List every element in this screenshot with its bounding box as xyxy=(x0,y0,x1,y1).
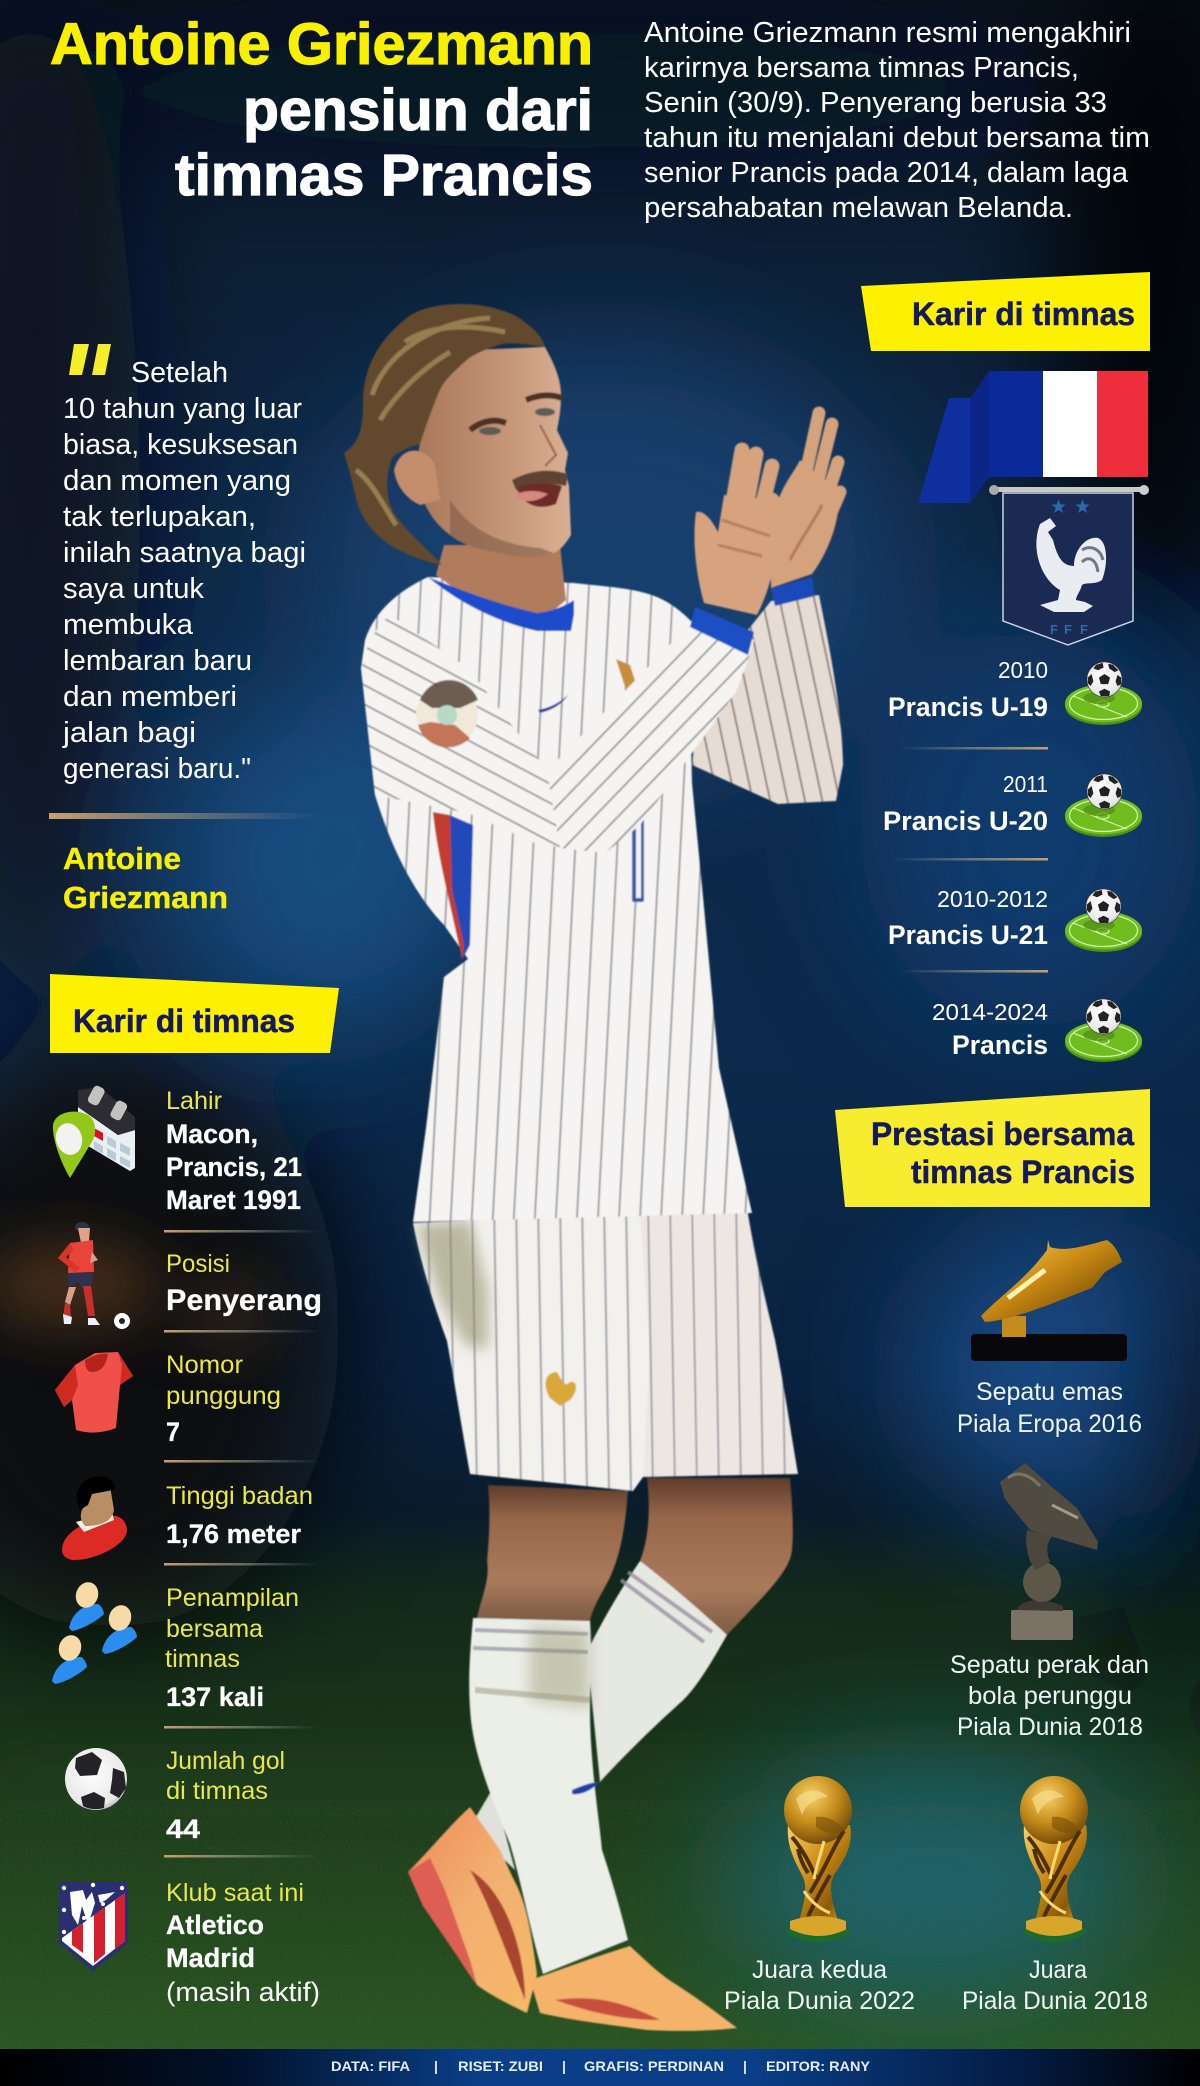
banner: karir di timnas right xyxy=(861,272,1150,351)
biodata penampilan: 137 kali xyxy=(166,1682,264,1712)
title xyxy=(50,12,593,208)
quote: 10 tahun yang luar xyxy=(63,393,302,425)
footer credits: GRAFIS: PERDINAN xyxy=(584,2058,724,2074)
biodata tinggi badan xyxy=(62,1476,313,1560)
icon: fff crest pennant: F xyxy=(1080,622,1088,637)
footer credits xyxy=(0,2049,1200,2086)
footer credits: DATA: FIFA xyxy=(331,2058,410,2074)
intro text block: karirnya bersama timnas Prancis, xyxy=(644,52,1079,84)
icon: ball on pitch xyxy=(1065,774,1142,837)
icon: player xyxy=(58,1222,130,1329)
quote: saya untuk xyxy=(63,573,204,605)
icon: quote marks xyxy=(69,344,111,375)
intro text block: Senin (30/9). Penyerang berusia 33 xyxy=(644,87,1107,119)
biodata posisi: Penyerang xyxy=(166,1284,322,1317)
career item U-19: Prancis U-19 xyxy=(888,692,1048,722)
biodata nomor punggung: Nomor xyxy=(166,1351,243,1379)
icon: atletico crest xyxy=(59,1882,128,1971)
biodata lahir: Maret 1991 xyxy=(166,1185,301,1215)
biodata lahir xyxy=(52,1084,302,1215)
intro text block: Antoine Griezmann resmi mengakhiri xyxy=(644,17,1131,49)
quote: generasi baru." xyxy=(63,753,251,785)
quote: jalan bagi xyxy=(62,717,196,749)
icon: fff crest pennant xyxy=(989,485,1149,645)
biodata nomor punggung: 7 xyxy=(166,1417,180,1447)
caption: champion: Piala Dunia 2018 xyxy=(962,1987,1148,2015)
banner: karir di timnas left: Karir di timnas xyxy=(73,1003,295,1039)
quote: Antoine xyxy=(63,841,181,876)
far sleeve and hand xyxy=(692,413,843,804)
quote: membuka xyxy=(63,609,194,641)
icon: world cup runner-up xyxy=(784,1776,852,1943)
shoes xyxy=(408,1807,737,2031)
caption: runner-up: Piala Dunia 2022 xyxy=(724,1987,915,2015)
icon: head xyxy=(62,1476,127,1560)
biodata jumlah gol xyxy=(65,1747,285,1844)
jersey torso xyxy=(361,577,752,1222)
quote: lembaran baru xyxy=(63,645,252,677)
legs xyxy=(469,1478,793,1974)
biodata lahir: Lahir xyxy=(166,1087,222,1115)
footer credits: RISET: ZUBI xyxy=(458,2058,543,2074)
caption: runner-up: Juara kedua xyxy=(752,1956,887,1984)
caption: runner-up xyxy=(724,1956,915,2015)
career item U-19 xyxy=(888,657,1142,725)
biodata lahir: Macon, xyxy=(166,1119,258,1149)
caption: silver boot: Sepatu perak dan xyxy=(950,1651,1149,1679)
icon: french flag xyxy=(918,371,1148,503)
intro text block: persahabatan melawan Belanda. xyxy=(644,192,1073,224)
icon: silver boot trophy xyxy=(1000,1463,1098,1640)
biodata jumlah gol: 44 xyxy=(166,1814,200,1844)
quote: dan momen yang xyxy=(63,465,291,497)
title: timnas Prancis xyxy=(175,143,593,208)
icon: world cup champion xyxy=(1020,1776,1088,1943)
caption: silver boot: Piala Dunia 2018 xyxy=(957,1713,1143,1741)
icon: fff crest pennant: F xyxy=(1064,622,1072,637)
footer credits: EDITOR: RANY xyxy=(766,2058,871,2074)
biodata posisi xyxy=(58,1222,322,1329)
player photo illustration xyxy=(344,304,843,2031)
icon: ball on pitch xyxy=(1065,889,1142,952)
caption: golden boot: Sepatu emas xyxy=(976,1378,1123,1406)
biodata jumlah gol: Jumlah gol xyxy=(166,1747,285,1775)
icon: fff crest pennant: ★ xyxy=(1074,497,1091,518)
career item senior: 2014-2024 xyxy=(932,999,1048,1025)
footer credits: | xyxy=(743,2058,747,2074)
biodata lahir: Prancis, 21 xyxy=(166,1152,302,1182)
career item U-21: 2010-2012 xyxy=(937,886,1048,912)
biodata penampilan: bersama xyxy=(166,1615,263,1643)
career item U-20: 2011 xyxy=(1003,771,1048,797)
title: pensiun dari xyxy=(243,78,593,143)
biodata penampilan: Penampilan xyxy=(166,1584,299,1612)
intro text block: senior Prancis pada 2014, dalam laga xyxy=(644,157,1129,189)
quote: tak terlupakan, xyxy=(63,501,256,533)
quote xyxy=(49,344,321,915)
intro text block: tahun itu menjalani debut bersama tim xyxy=(644,122,1150,154)
title: Antoine Griezmann xyxy=(50,12,593,77)
biodata klub: Atletico xyxy=(166,1910,264,1940)
jersey near arm xyxy=(361,615,754,853)
icon: people xyxy=(52,1579,137,1684)
shorts xyxy=(413,1208,798,1491)
quote: biasa, kesuksesan xyxy=(63,429,298,461)
banner: karir di timnas left xyxy=(50,974,339,1053)
icon: football xyxy=(65,1748,127,1810)
icon: golden boot trophy xyxy=(971,1240,1127,1361)
icon: fff crest pennant: ★ xyxy=(1050,497,1067,518)
caption: golden boot xyxy=(957,1378,1142,1438)
caption: champion xyxy=(962,1956,1148,2015)
panel: biodata xyxy=(52,1084,322,2007)
banner: prestasi: timnas Prancis xyxy=(911,1154,1135,1190)
banner: prestasi xyxy=(835,1089,1150,1207)
footer credits: | xyxy=(562,2058,566,2074)
biodata tinggi badan: 1,76 meter xyxy=(166,1519,301,1549)
biodata nomor punggung: punggung xyxy=(166,1382,281,1410)
intro text block xyxy=(644,17,1150,224)
biodata klub: Klub saat ini xyxy=(166,1879,304,1907)
career item senior xyxy=(932,999,1142,1062)
career item U-21: Prancis U-21 xyxy=(888,920,1048,950)
biodata klub xyxy=(59,1879,320,2007)
biodata nomor punggung xyxy=(55,1351,281,1447)
banner: karir di timnas right: Karir di timnas xyxy=(912,296,1135,332)
panel: career timeline xyxy=(883,657,1142,1062)
quote: Setelah xyxy=(131,357,228,389)
biodata penampilan: timnas xyxy=(165,1645,240,1673)
icon: fff crest pennant: F xyxy=(1050,622,1058,637)
career item U-21 xyxy=(888,886,1142,952)
caption: silver boot: bola perunggu xyxy=(968,1682,1132,1710)
biodata jumlah gol: di timnas xyxy=(166,1777,268,1805)
quote: inilah saatnya bagi xyxy=(63,537,306,569)
quote: dan memberi xyxy=(63,681,237,713)
banner: prestasi: Prestasi bersama xyxy=(871,1116,1134,1152)
caption: silver boot xyxy=(950,1651,1149,1741)
neck and collar xyxy=(428,545,574,631)
biodata penampilan xyxy=(52,1579,299,1712)
career item U-20: Prancis U-20 xyxy=(883,806,1048,836)
caption: champion: Juara xyxy=(1029,1956,1087,1984)
biodata klub: Madrid xyxy=(166,1943,255,1973)
caption: golden boot: Piala Eropa 2016 xyxy=(957,1410,1142,1438)
head xyxy=(344,304,571,565)
icon: ball on pitch xyxy=(1065,662,1142,725)
near hand xyxy=(690,450,777,655)
footer credits: | xyxy=(434,2058,438,2074)
career item U-20 xyxy=(883,771,1142,837)
biodata tinggi badan: Tinggi badan xyxy=(166,1482,313,1510)
career item U-19: 2010 xyxy=(998,657,1048,683)
career item senior: Prancis xyxy=(952,1030,1048,1060)
biodata posisi: Posisi xyxy=(166,1250,230,1278)
quote: Griezmann xyxy=(63,880,228,915)
icon: shirt xyxy=(55,1352,133,1433)
biodata klub: (masih aktif) xyxy=(166,1977,320,2007)
icon: ball on pitch xyxy=(1065,999,1142,1062)
icon: calendar and pin xyxy=(52,1084,135,1178)
